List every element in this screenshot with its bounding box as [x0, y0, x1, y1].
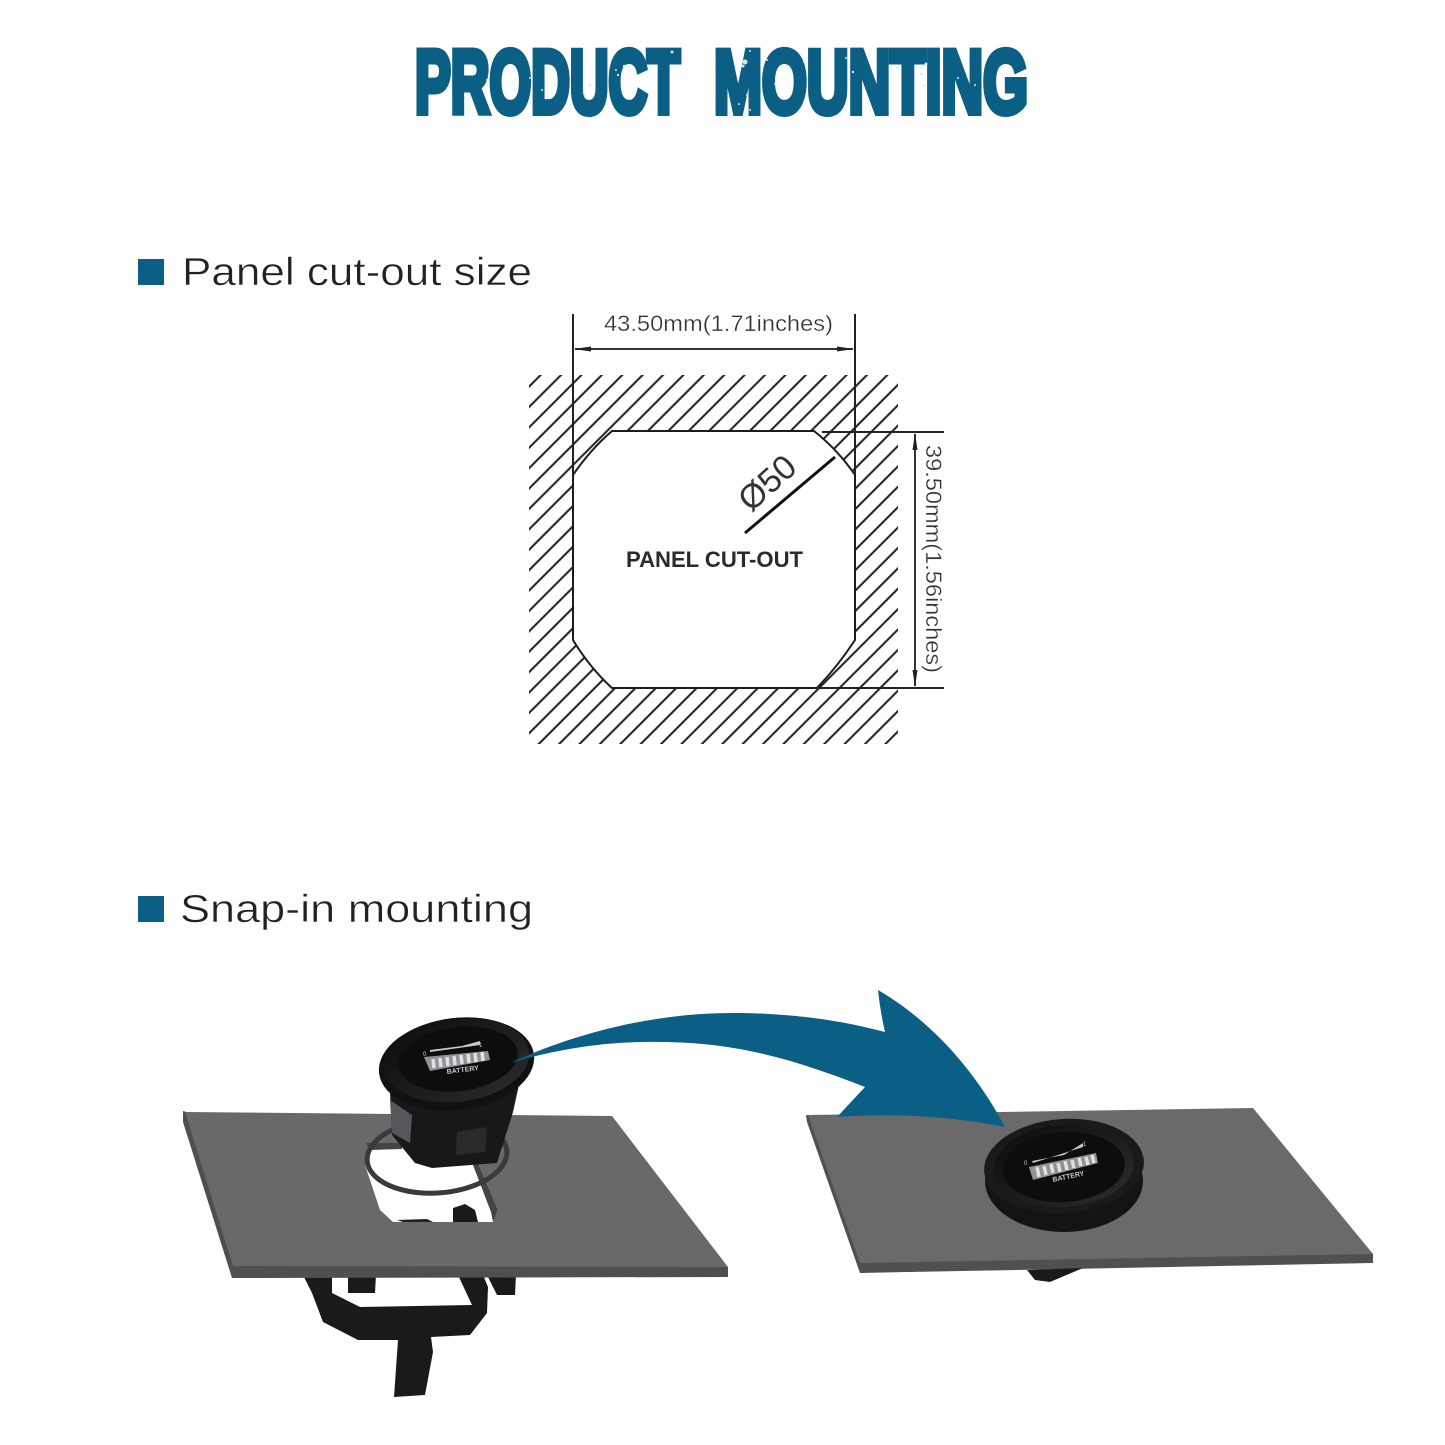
meter display: 0	[1024, 1161, 1028, 1167]
panel plate with hole	[183, 1111, 728, 1278]
cut-out label: PANEL CUT-OUT	[626, 547, 804, 572]
hatched panel area	[529, 375, 898, 744]
meter display: 1	[479, 1043, 483, 1049]
height dimension: 39.50mm(1.56inches)	[921, 445, 946, 673]
height dimension	[817, 432, 946, 688]
meter display: BATTERY	[1052, 1170, 1085, 1184]
right panel plate	[806, 1108, 1373, 1282]
meter bezel	[373, 1009, 540, 1119]
clip below panel	[1027, 1268, 1083, 1282]
cut-out opening	[573, 431, 855, 688]
diameter label: Ø50	[731, 448, 804, 519]
meter display	[1024, 1142, 1098, 1184]
curved arrow	[510, 990, 1005, 1127]
meter display: 1	[1083, 1142, 1087, 1148]
meter display	[423, 1041, 490, 1076]
width dimension	[573, 311, 855, 475]
width dimension: 43.50mm(1.71inches)	[604, 311, 833, 336]
meter display: BATTERY	[446, 1065, 480, 1076]
sealing ring	[365, 1114, 509, 1198]
left illustration: meter above panel	[183, 1009, 728, 1397]
panel cut-out technical drawing	[529, 311, 946, 744]
meter body	[385, 1080, 520, 1168]
diameter label	[731, 448, 835, 533]
meter display: 0	[423, 1052, 427, 1058]
title: MOUNTING	[714, 32, 1028, 132]
mounting clip under panel	[303, 1275, 516, 1397]
title: PRODUCT	[415, 32, 680, 132]
heading: panel cut-out size: Panel cut-out size	[182, 251, 532, 294]
meter bezel	[985, 1130, 1143, 1232]
right illustration: installed meter	[981, 1114, 1147, 1232]
heading: snap-in mounting: Snap-in mounting	[180, 888, 533, 931]
